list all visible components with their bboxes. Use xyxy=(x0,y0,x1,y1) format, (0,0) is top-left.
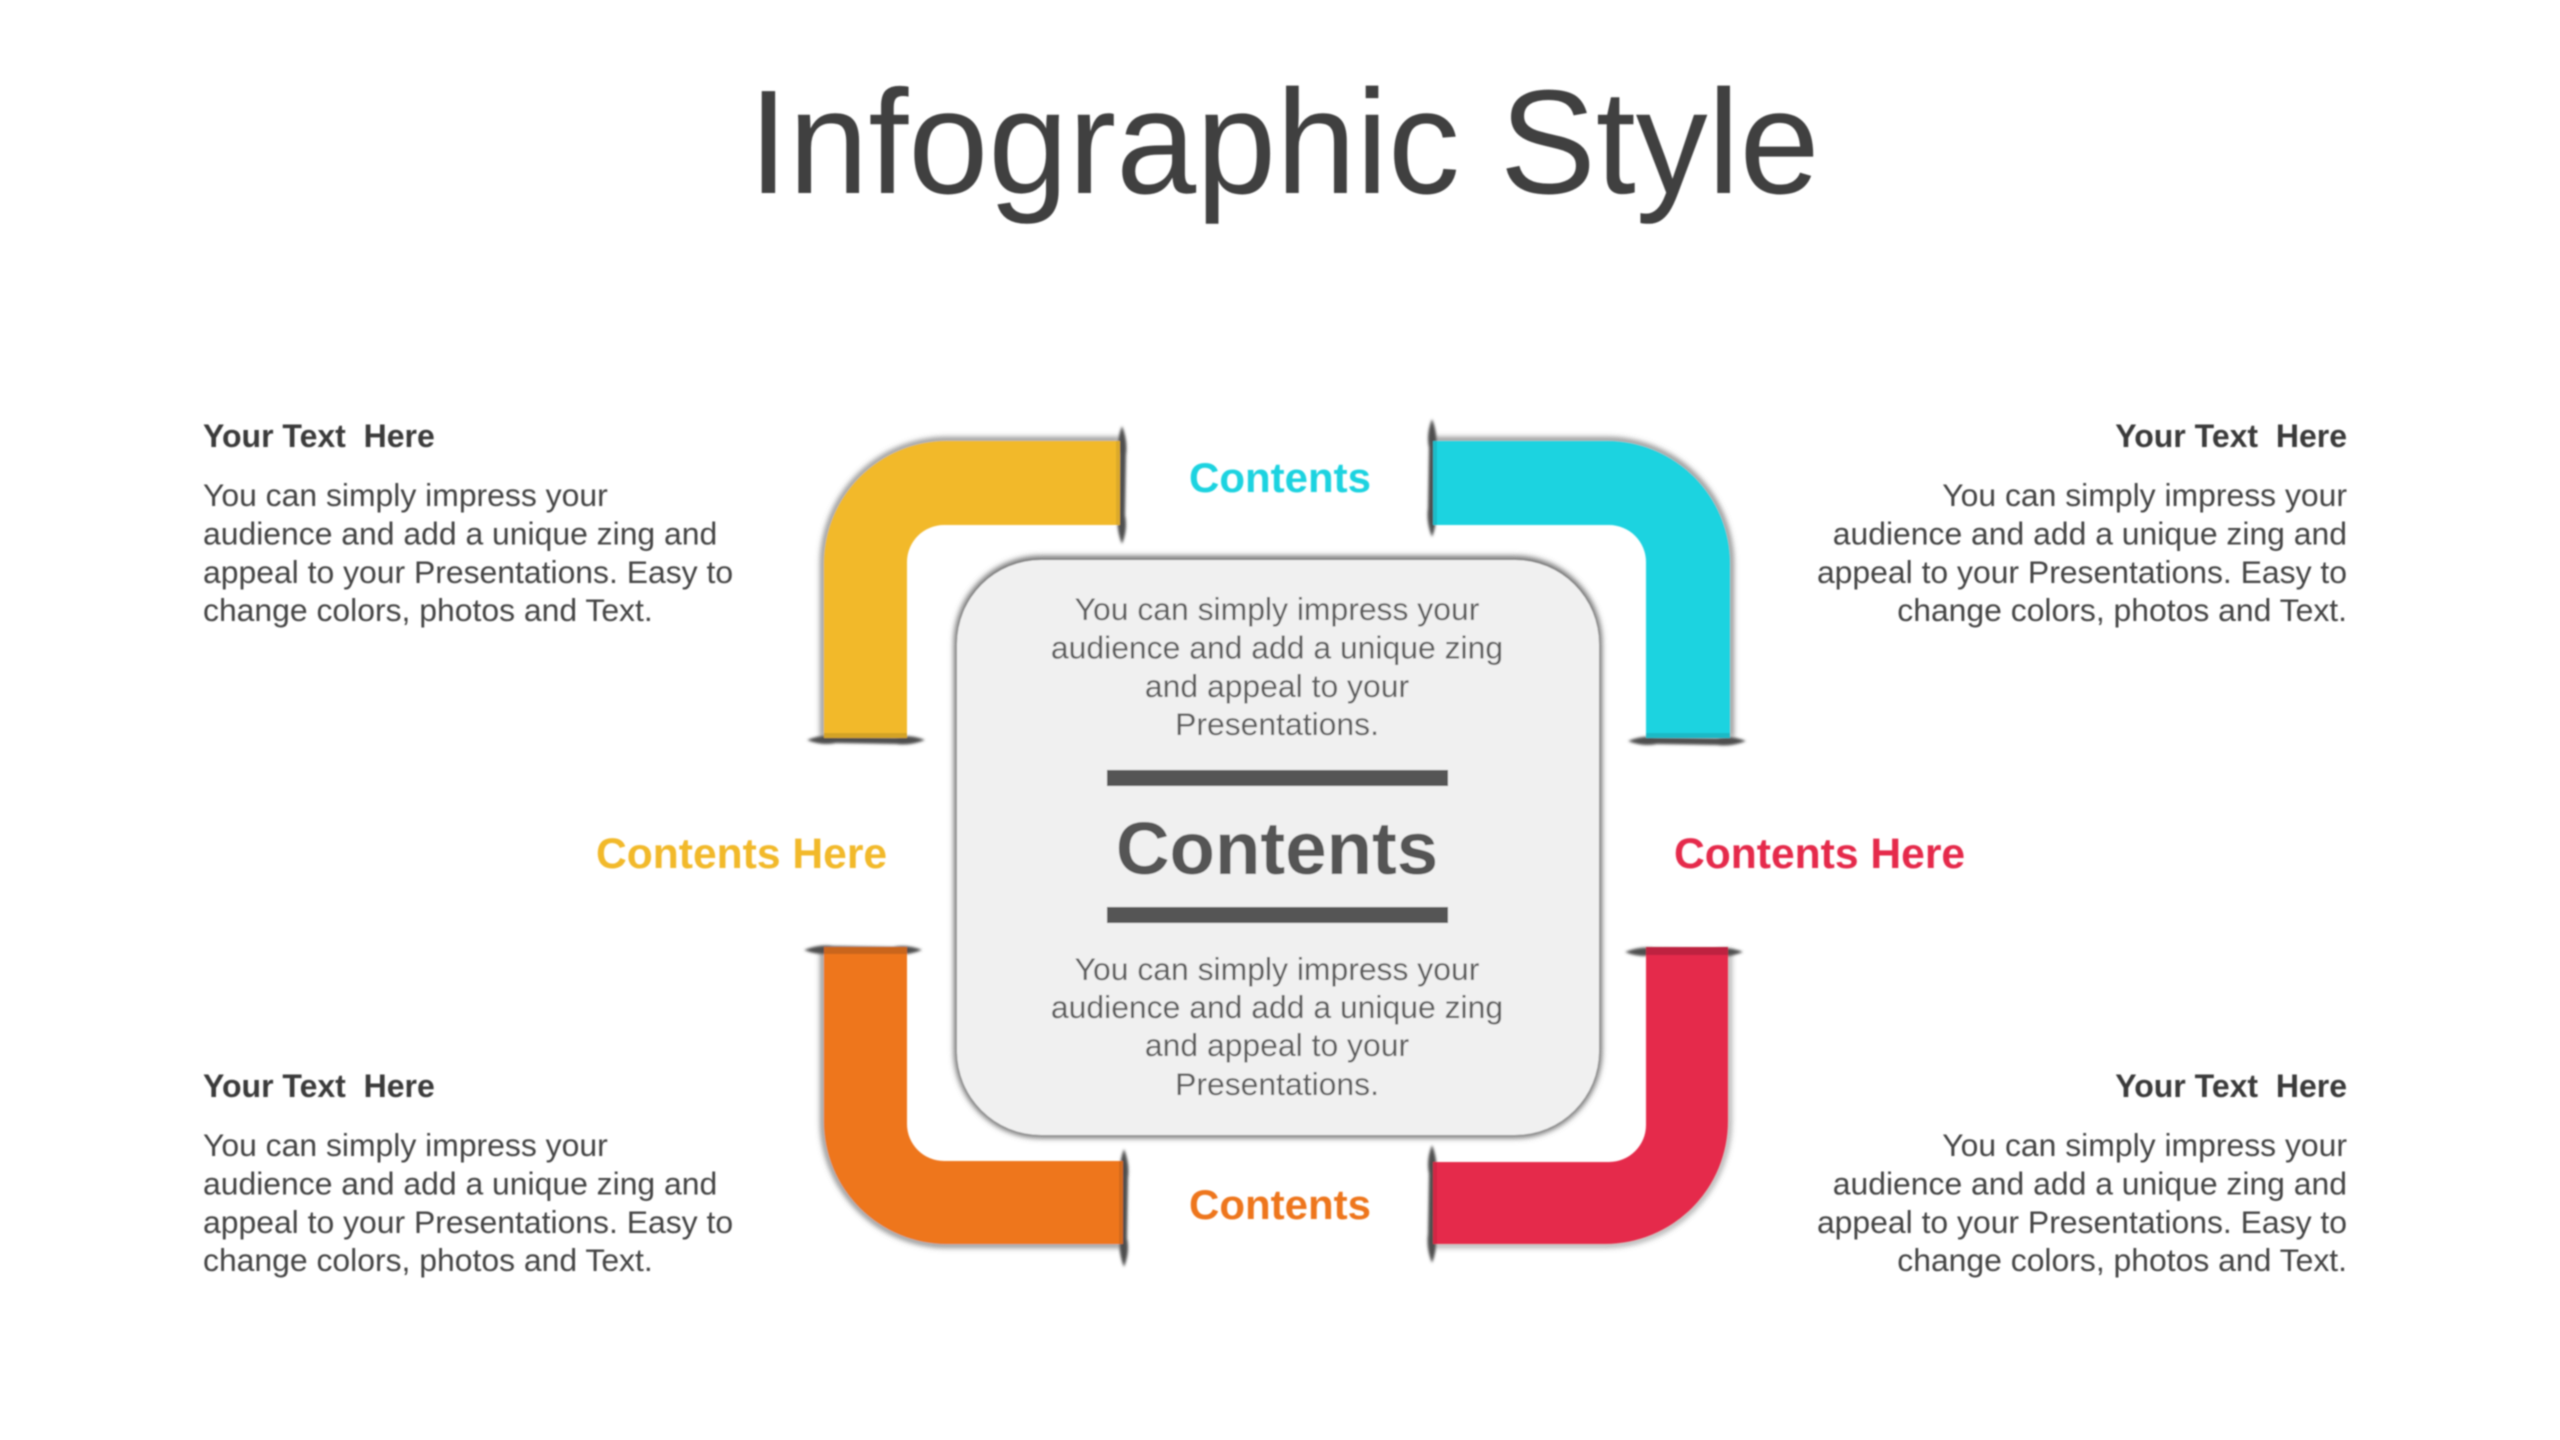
text: card upper paragraph: Presentations. xyxy=(1175,706,1379,742)
text block: top-right: appeal to your Presentations. Easy to xyxy=(1817,554,2347,590)
label: yellow Contents Here: Contents Here xyxy=(596,830,887,878)
divider: lower bar xyxy=(1107,907,1448,923)
text block: top-right xyxy=(1817,418,2347,628)
text block: bottom-left xyxy=(203,1068,733,1278)
text: card upper paragraph: You can simply impress your xyxy=(1075,591,1480,627)
text block: bottom-left: You can simply impress your xyxy=(203,1127,608,1163)
text: card lower paragraph: audience and add a unique zing xyxy=(1051,989,1503,1025)
label: red Contents Here: Contents Here xyxy=(1674,830,1965,878)
text block: top-left: appeal to your Presentations. Easy to xyxy=(203,554,733,590)
ribbon: yellow top-left xyxy=(807,426,1126,744)
text: card upper paragraph: and appeal to your xyxy=(1145,668,1409,704)
label: cyan Contents: Contents xyxy=(1189,454,1371,501)
ribbon: red bottom-right xyxy=(1428,947,1743,1263)
text block: bottom-left: change colors, photos and Text. xyxy=(203,1242,653,1278)
text block: bottom-left: appeal to your Presentations. Easy to xyxy=(203,1204,733,1240)
text block: bottom-right: Your Text Here xyxy=(2115,1068,2347,1104)
panel: central contents card xyxy=(954,556,1602,1138)
text block: bottom-right xyxy=(1817,1068,2347,1278)
text block: top-right: audience and add a unique zing and xyxy=(1833,516,2347,552)
text: card lower paragraph xyxy=(1051,951,1503,1102)
heading: card Contents: Contents xyxy=(1116,807,1438,890)
text block: top-right: You can simply impress your xyxy=(1942,477,2347,513)
ribbon: cyan top-right xyxy=(1428,419,1746,746)
text: card lower paragraph: and appeal to your xyxy=(1145,1027,1409,1063)
text block: top-left xyxy=(203,418,733,628)
text block: bottom-left: audience and add a unique zing and xyxy=(203,1166,717,1202)
text block: top-left: Your Text Here xyxy=(203,418,435,454)
text: card lower paragraph: You can simply impress your xyxy=(1075,951,1480,987)
text block: bottom-right: audience and add a unique zing and xyxy=(1833,1166,2347,1202)
ribbon: orange bottom-left xyxy=(804,946,1128,1267)
text block: bottom-right: appeal to your Presentations. Easy to xyxy=(1817,1204,2347,1240)
divider: upper bar xyxy=(1107,770,1448,786)
title: Infographic Style xyxy=(748,59,1820,224)
text block: bottom-right: change colors, photos and Text. xyxy=(1897,1242,2347,1278)
text block: top-left: audience and add a unique zing and xyxy=(203,516,717,552)
text: card lower paragraph: Presentations. xyxy=(1175,1066,1379,1102)
text block: top-left: You can simply impress your xyxy=(203,477,608,513)
text block: top-left: change colors, photos and Text. xyxy=(203,592,653,628)
text: card upper paragraph xyxy=(1051,591,1503,742)
text: card upper paragraph: audience and add a unique zing xyxy=(1051,630,1503,666)
text block: top-right: change colors, photos and Text. xyxy=(1897,592,2347,628)
text block: bottom-left: Your Text Here xyxy=(203,1068,435,1104)
text block: top-right: Your Text Here xyxy=(2115,418,2347,454)
text block: bottom-right: You can simply impress your xyxy=(1942,1127,2347,1163)
label: orange Contents: Contents xyxy=(1189,1181,1371,1228)
